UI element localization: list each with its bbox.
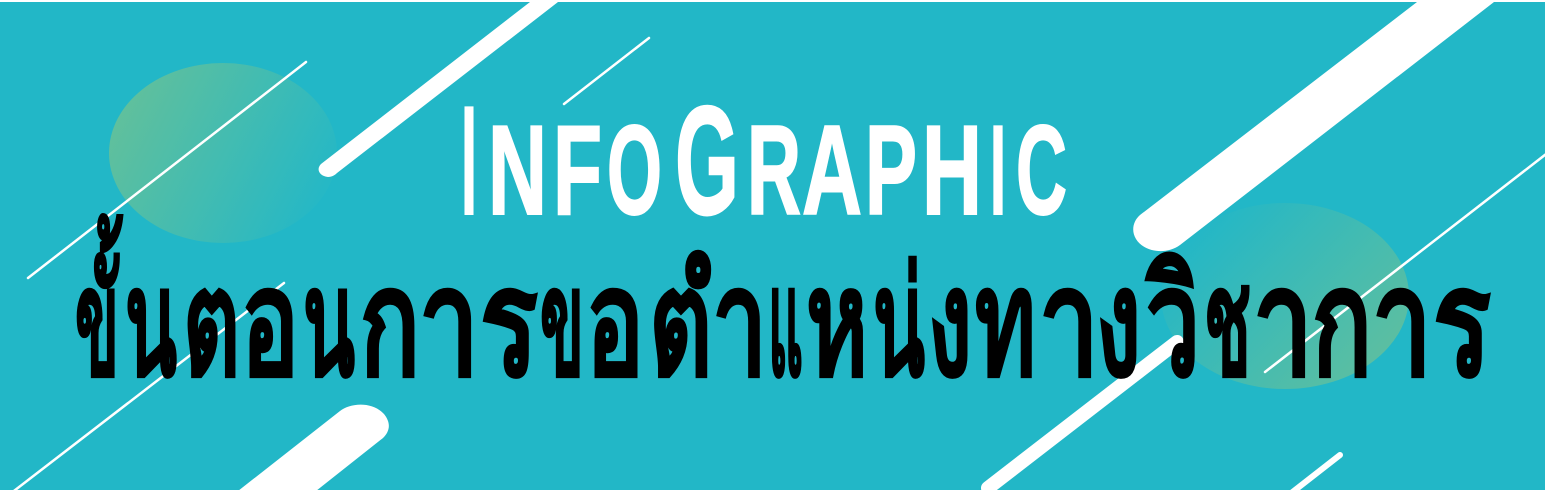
- subtitle: Thai heading: ก: [1312, 239, 1372, 407]
- blob left: [109, 63, 337, 243]
- title: InfoGraphic: C: [1016, 99, 1067, 241]
- thick bar top right: [1133, 2, 1494, 251]
- subtitle: Thai heading: อ: [586, 239, 644, 407]
- thick bar bottom left: [238, 405, 389, 491]
- subtitle: Thai heading: ช: [1204, 239, 1251, 407]
- subtitle: Thai heading: ง: [1096, 239, 1141, 407]
- subtitle: Thai heading: า: [1372, 239, 1432, 407]
- subtitle: Thai heading: า: [419, 239, 479, 407]
- subtitle: Thai heading: ร: [480, 239, 538, 407]
- subtitle: Thai heading: น่: [873, 239, 925, 407]
- title: InfoGraphic: R: [747, 99, 801, 241]
- subtitle: Thai heading: แ: [768, 239, 803, 407]
- subtitle: Thai heading: ร: [1433, 239, 1491, 407]
- thin line top left: [28, 62, 306, 278]
- short bar bottom right: [1290, 455, 1340, 491]
- bar bottom right: [988, 342, 1177, 488]
- thick bar top left: [319, 2, 558, 177]
- subtitle: Thai heading: น: [303, 239, 355, 407]
- title: InfoGraphic: [461, 74, 1067, 247]
- subtitle: Thai heading: ก: [360, 239, 420, 407]
- title: InfoGraphic: N: [488, 99, 547, 241]
- title: InfoGraphic: I: [461, 74, 477, 247]
- title: InfoGraphic: O: [607, 99, 662, 241]
- title: InfoGraphic: G: [675, 74, 739, 247]
- subtitle: Thai heading: ต: [183, 239, 240, 407]
- subtitle: Thai heading: ขั้: [75, 213, 123, 407]
- subtitle: Thai heading: ท: [975, 239, 1036, 407]
- subtitle: Thai heading: น: [125, 239, 177, 407]
- thin line right: [1265, 151, 1546, 372]
- subtitle: Thai heading: า: [1039, 239, 1099, 407]
- subtitle: Thai heading: วิ: [1145, 239, 1200, 407]
- subtitle: Thai heading: ง: [928, 239, 972, 407]
- subtitle: Thai heading: ห: [806, 239, 868, 407]
- title: InfoGraphic: H: [922, 99, 982, 241]
- subtitle: Thai heading: ข: [540, 239, 584, 407]
- title: InfoGraphic: F: [553, 99, 602, 241]
- title: InfoGraphic: I: [990, 99, 1006, 241]
- title: InfoGraphic: P: [865, 99, 917, 241]
- subtitle: Thai heading: อ: [241, 239, 299, 407]
- subtitle: Thai heading: า: [1253, 239, 1313, 407]
- title: InfoGraphic: A: [802, 99, 862, 241]
- blob right: [1161, 203, 1409, 389]
- thin line lower left: [10, 283, 284, 491]
- subtitle: Thai heading: ตำ: [649, 239, 767, 407]
- thin line top centre: [564, 38, 649, 104]
- subtitle: Thai heading: [75, 213, 1491, 407]
